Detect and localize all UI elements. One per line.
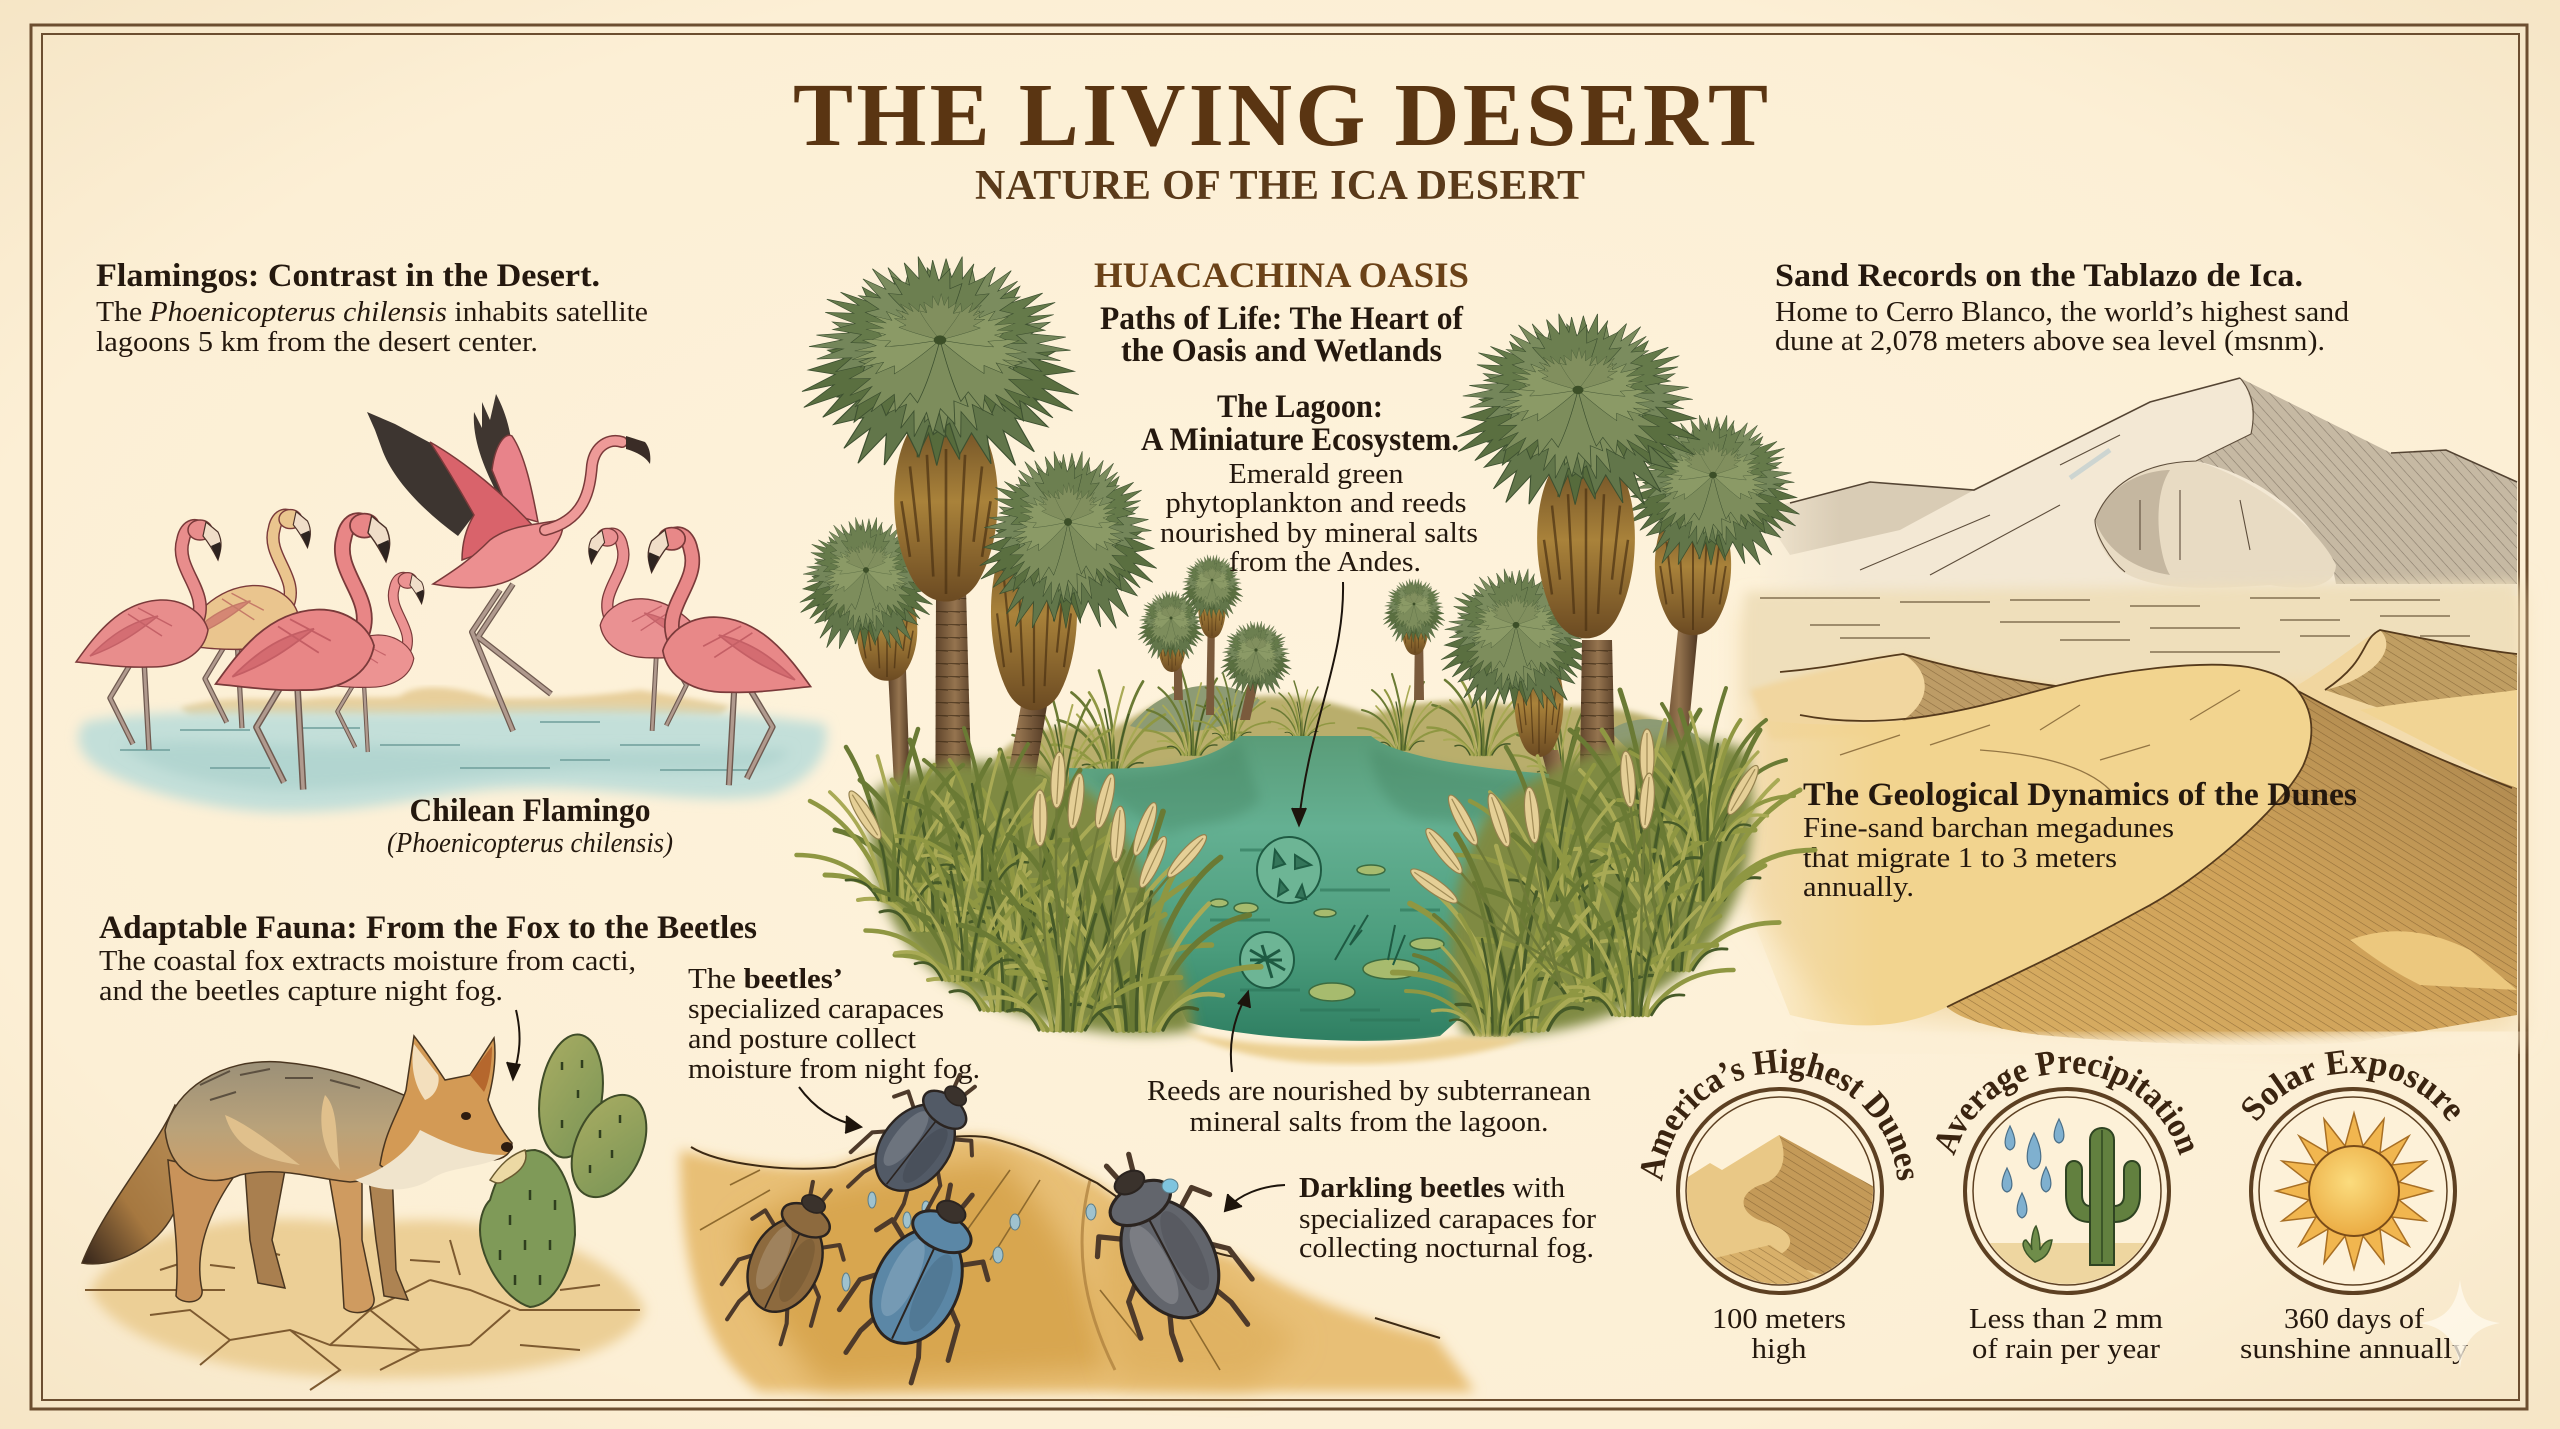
panel: darkling beetles note: collecting nocturnal fog. xyxy=(1299,1233,1594,1264)
panel: fauna text: Adaptable Fauna: From the Fox to the Beetles xyxy=(99,910,757,946)
reeds note: Reeds are nourished by subterranean xyxy=(1147,1076,1591,1107)
droplets xyxy=(842,1192,1096,1291)
reeds note xyxy=(1147,1076,1591,1138)
cactus xyxy=(480,1030,661,1307)
grass banks xyxy=(796,688,1815,1037)
stat: dunes height xyxy=(1712,1304,1846,1365)
palm: mid right xyxy=(1426,565,1606,830)
badge: Solar Exposure: Solar Exposure xyxy=(2242,1050,2460,1122)
big barchan dune shaded face xyxy=(1947,691,2517,1045)
cattail reeds xyxy=(844,729,1766,1025)
panel: fauna text: The coastal fox extracts moisture from cacti, xyxy=(99,946,636,977)
lagoon text block: A Miniature Ecosystem. xyxy=(1141,422,1459,458)
droplet on grey beetle xyxy=(1162,1179,1178,1193)
arrow: reeds note to lagoon xyxy=(1231,992,1250,1072)
oasis heading: the Oasis and Wetlands xyxy=(1121,333,1442,369)
palm: left middle xyxy=(962,447,1174,880)
oasis heading xyxy=(1094,255,1469,369)
badge: America's Highest Dunes: America’s Highest Dunes xyxy=(1640,1048,1914,1182)
mid dunes xyxy=(1750,654,2060,740)
panel: flamingo text: lagoons 5 km from the desert center. xyxy=(96,327,538,358)
panel: fauna text: and the beetles capture night fog. xyxy=(99,976,503,1007)
title: THE LIVING DESERT xyxy=(793,66,1768,165)
stat: rainfall: Less than 2 mm xyxy=(1969,1304,2163,1335)
badge: America's Highest Dunes xyxy=(1640,1048,1914,1295)
panel: Sand Records text: Sand Records on the Tablazo de Ica. xyxy=(1775,258,2303,294)
arrow: darkling beetles xyxy=(1225,1185,1285,1211)
lagoon text block xyxy=(1141,389,1478,578)
panel: Geological Dynamics text: Fine-sand barchan megadunes xyxy=(1803,813,2174,844)
lagoon text block: nourished by mineral salts xyxy=(1160,518,1478,549)
cracked ground xyxy=(90,1219,645,1378)
panel: fauna text xyxy=(99,910,757,1007)
panel: Geological Dynamics text: annually. xyxy=(1803,872,1914,903)
panel: flamingo text: The Phoenicopterus chilensis inhabits satellite xyxy=(96,297,648,328)
panel: Sand Records text: Home to Cerro Blanco, the world’s highest sand xyxy=(1775,297,2349,328)
arrow: lagoon text to phytoplankton xyxy=(1292,582,1343,825)
lagoon water xyxy=(1069,736,1560,1041)
panel: flamingo text: Flamingos: Contrast in the Desert. xyxy=(96,258,600,294)
mountain: Cerro Blanco xyxy=(1760,378,2517,596)
panel: Geological Dynamics text: The Geological Dynamics of the Dunes xyxy=(1803,777,2357,813)
lagoon text block: Emerald green xyxy=(1228,459,1404,490)
reeds note: mineral salts from the lagoon. xyxy=(1190,1107,1548,1138)
illustration: flamingos in lagoon xyxy=(76,394,827,812)
arrow: beetles note to top beetle xyxy=(799,1087,861,1133)
sandy shore xyxy=(1180,1030,1530,1064)
badge: Solar Exposure xyxy=(2242,1050,2460,1295)
panel: Geological Dynamics text xyxy=(1803,777,2357,903)
panel: Sand Records text xyxy=(1775,258,2349,357)
lily pads xyxy=(1210,865,1444,1001)
stat: rainfall xyxy=(1969,1304,2163,1365)
arrow: fauna text to cactus xyxy=(507,1010,520,1079)
panel: beetles note: and posture collect xyxy=(688,1024,916,1055)
panel: beetles note: specialized carapaces xyxy=(688,994,944,1025)
oasis heading: HUACACHINA OASIS xyxy=(1094,255,1469,295)
illustration: fox and cactus xyxy=(82,1030,661,1390)
palm: far left xyxy=(787,514,945,785)
stat: sunshine: sunshine annually xyxy=(2240,1334,2468,1365)
phytoplankton circles xyxy=(1240,837,1405,988)
stat: rainfall: of rain per year xyxy=(1972,1334,2161,1365)
beetle: right grey xyxy=(1062,1130,1272,1372)
panel: Geological Dynamics text: that migrate 1 to 3 meters xyxy=(1803,843,2117,874)
panel: Sand Records text: dune at 2,078 meters above sea level (msnm). xyxy=(1775,326,2325,357)
panel: beetles note xyxy=(688,964,980,1085)
palm: far right xyxy=(1610,411,1816,800)
badge: Average Precipitation xyxy=(1936,1052,2194,1295)
beetle: top xyxy=(833,1051,1006,1235)
lagoon text block: phytoplankton and reeds xyxy=(1166,488,1466,519)
back vegetation xyxy=(985,693,1730,830)
panel: right side dunes landscape xyxy=(1745,378,2517,1051)
caption: Chilean Flamingo: Chilean Flamingo xyxy=(410,793,650,829)
lagoon text block: The Lagoon: xyxy=(1217,389,1383,425)
beetle: brown xyxy=(709,1165,868,1353)
stat: dunes height: high xyxy=(1752,1334,1806,1365)
big barchan dune lit face xyxy=(1745,665,2311,1025)
sparkle watermark xyxy=(2420,1280,2500,1368)
caption: Chilean Flamingo: (Phoenicopterus chilensis) xyxy=(387,828,673,859)
fox xyxy=(82,1036,513,1313)
palm: big left xyxy=(775,251,1105,911)
plains xyxy=(1745,582,2517,700)
panel: beetles note: The beetles’ xyxy=(688,964,843,995)
badge: Average Precipitation: Average Precipitation xyxy=(1936,1052,2194,1156)
palm: big right xyxy=(1433,309,1723,900)
beetle: blue xyxy=(824,1165,1018,1394)
panel: beetles note: moisture from night fog. xyxy=(688,1054,980,1085)
panel: darkling beetles note: Darkling beetles with xyxy=(1299,1173,1565,1204)
panel: darkling beetles note xyxy=(1299,1173,1597,1264)
illustration: Huacachina oasis xyxy=(775,251,1816,1064)
stat: sunshine: 360 days of xyxy=(2284,1304,2425,1335)
flying flamingo xyxy=(367,394,650,731)
stat: dunes height: 100 meters xyxy=(1712,1304,1846,1335)
lagoon text block: from the Andes. xyxy=(1229,547,1421,578)
soft lower fade xyxy=(1800,1035,2517,1051)
oasis heading: Paths of Life: The Heart of xyxy=(1100,301,1464,337)
illustration: sand mound with beetles xyxy=(680,1051,1475,1394)
panel: flamingo text xyxy=(96,258,648,358)
sand wash xyxy=(1745,590,2517,1040)
stat: sunshine xyxy=(2240,1304,2468,1365)
small distant palms xyxy=(1131,553,1451,720)
caption: Chilean Flamingo xyxy=(387,793,673,859)
subtitle: NATURE OF THE ICA DESERT xyxy=(975,163,1585,209)
panel: darkling beetles note: specialized carapaces for xyxy=(1299,1204,1597,1235)
